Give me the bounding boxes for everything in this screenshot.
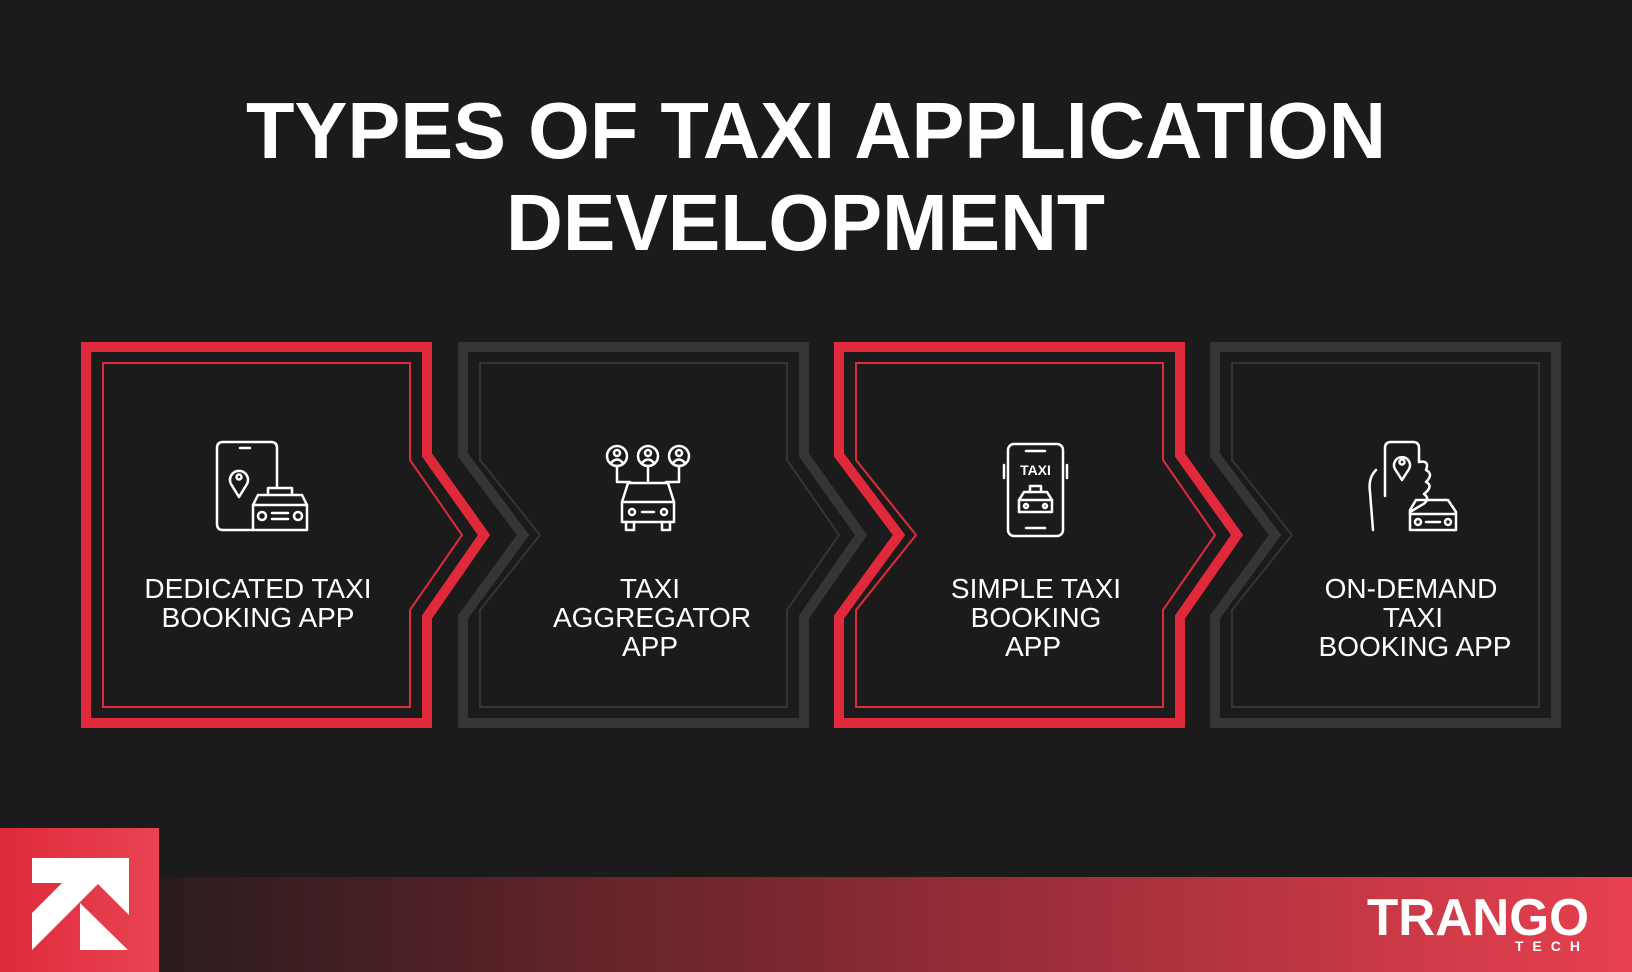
text labels: TAXI: [620, 573, 680, 604]
text labels: AGGREGATOR: [553, 602, 751, 633]
panel: dedicated taxi booking app: [86, 347, 484, 723]
panel: on-demand taxi booking app: [1215, 347, 1556, 723]
title: TYPES OF TAXI APPLICATION: [246, 86, 1386, 175]
text labels: [144, 573, 1511, 662]
text labels: APP: [1005, 631, 1061, 662]
footer bar: [159, 877, 1632, 972]
title: [246, 86, 1386, 267]
text labels: TAXI: [1383, 602, 1443, 633]
icon: phone taxi: TAXI: [1020, 462, 1051, 478]
text labels: DEDICATED TAXI: [144, 573, 372, 604]
icon: aggregator: [607, 446, 689, 530]
panel: taxi aggregator app: [463, 347, 861, 723]
text labels: BOOKING APP: [1319, 631, 1511, 662]
panel: simple taxi booking app: [839, 347, 1237, 723]
text labels: ON-DEMAND: [1325, 573, 1497, 604]
icon: hand phone taxi: [1370, 442, 1456, 530]
icon: phone with taxi: [217, 442, 307, 530]
text labels: APP: [622, 631, 678, 662]
brand: trango tech: TRANGO: [1367, 889, 1589, 947]
icon: phone taxi: [1004, 444, 1067, 536]
text labels: SIMPLE TAXI: [951, 573, 1121, 604]
text labels: BOOKING APP: [162, 602, 354, 633]
brand: trango tech: TECH: [1515, 938, 1589, 954]
title: DEVELOPMENT: [506, 178, 1105, 267]
text labels: BOOKING: [971, 602, 1101, 633]
logo square: [0, 828, 159, 972]
